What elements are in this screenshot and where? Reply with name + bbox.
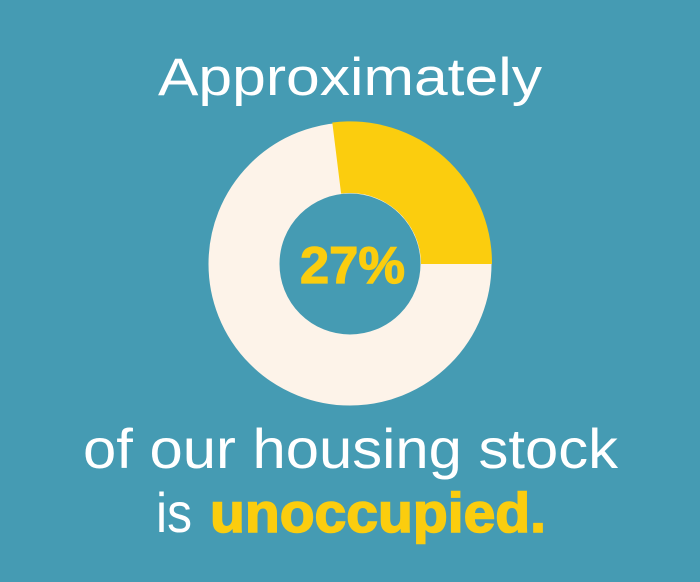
- donut chart: [244, 121, 492, 370]
- text: is unoccupied: [156, 481, 546, 544]
- text: unoccupied (highlighted): unoccupied.: [210, 481, 546, 544]
- donut centre value: 27%: [300, 237, 405, 295]
- title: Approximately: Approximately: [158, 48, 543, 107]
- donut segment: 27%: [332, 121, 492, 264]
- text: is: is: [156, 481, 192, 544]
- donut ring: remaining share: [244, 158, 456, 370]
- text: of our housing stock: of our housing stock: [83, 417, 619, 480]
